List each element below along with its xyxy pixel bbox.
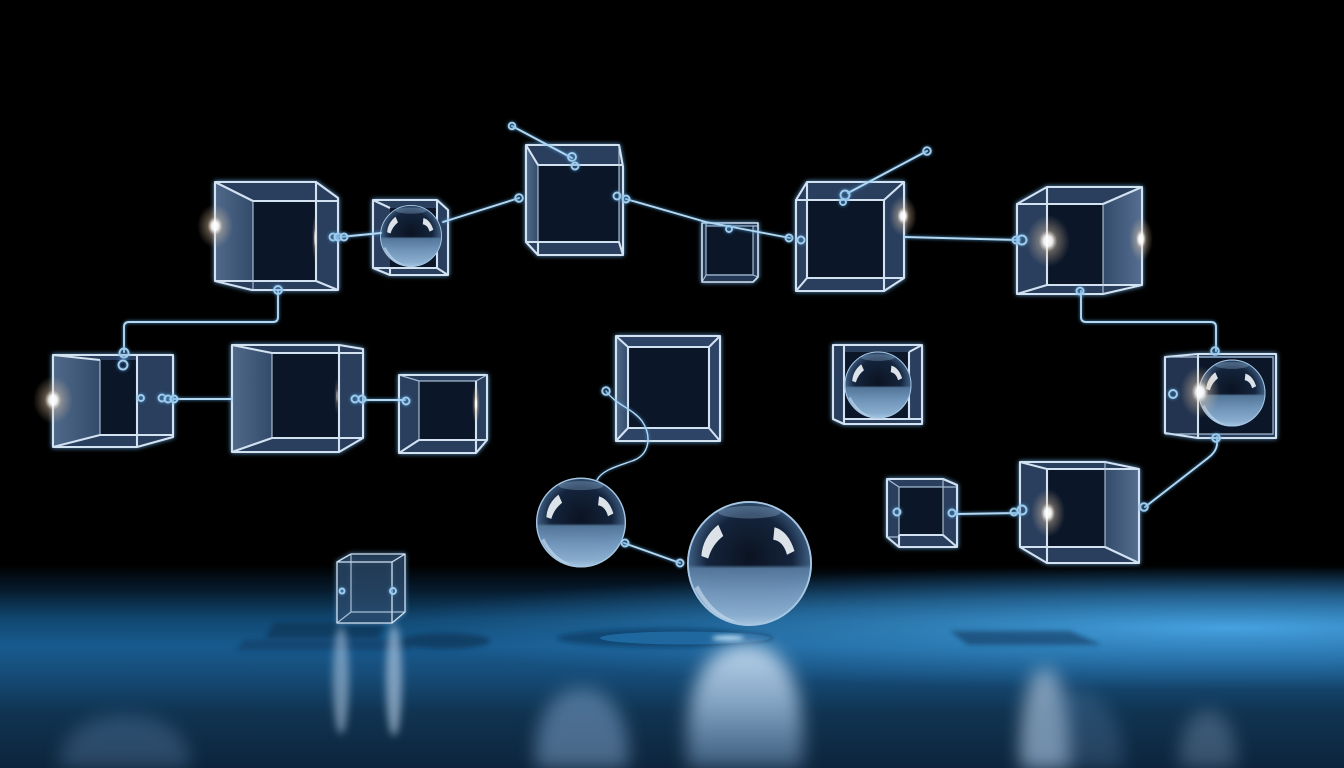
reflections: [60, 624, 1236, 768]
connector rings: [118, 123, 1220, 594]
cube 12 with sphere: [1165, 354, 1276, 438]
cube 5: [796, 182, 904, 291]
cube 2 with sphere: [373, 200, 448, 275]
sphere large: [687, 501, 812, 626]
cube 7 left: [53, 355, 173, 447]
floor shadows: [235, 622, 1102, 650]
cube 3 top centre: [526, 145, 623, 255]
cube 10 centre front-on: [616, 336, 720, 441]
reflective blue floor: [0, 565, 1344, 768]
light flares: [33, 196, 1220, 537]
cube 13 small: [887, 479, 957, 547]
sphere in cube 11: [844, 352, 912, 418]
sphere in cube 12: [1198, 360, 1266, 426]
cube 4 small: [702, 223, 758, 282]
sphere shadow ring on floor: [557, 628, 773, 648]
cube 15 near floor: [337, 554, 405, 623]
cube 14: [1020, 462, 1139, 563]
cube 8: [232, 345, 363, 452]
cube 1 top left: [215, 182, 338, 290]
cube 11 with sphere: [833, 345, 922, 424]
cube 6: [1017, 187, 1142, 294]
sphere medium: [536, 478, 626, 568]
wires: [124, 126, 1217, 563]
cube 9: [399, 375, 487, 453]
sphere in cube 2: [380, 205, 442, 267]
